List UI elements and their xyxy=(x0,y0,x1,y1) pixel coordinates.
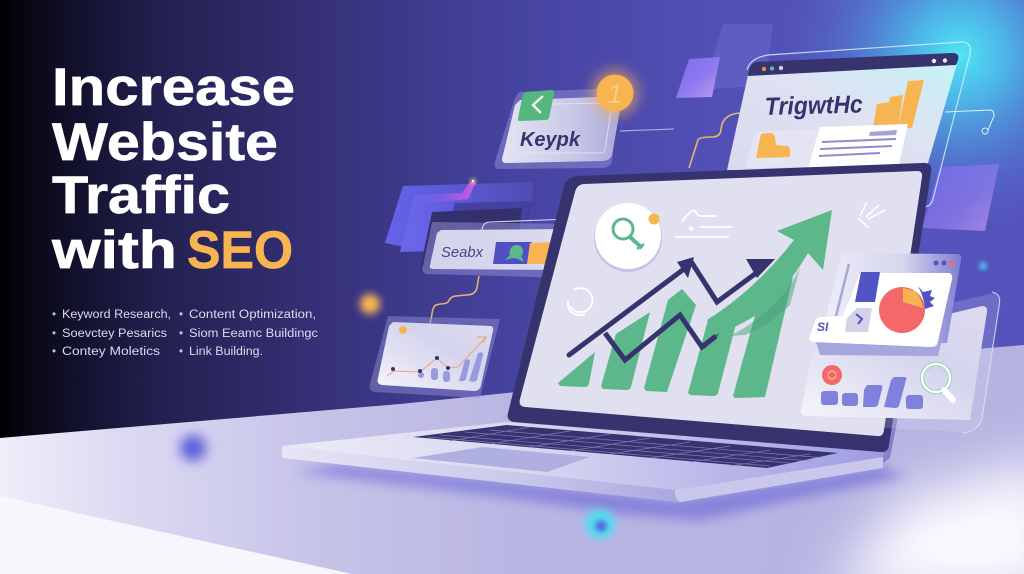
dark lower line xyxy=(605,315,720,360)
search text: Seabx xyxy=(441,244,483,261)
title: Increase xyxy=(52,58,295,117)
list column one: Soevctey Pesarics xyxy=(62,328,167,340)
panel: keyword card xyxy=(495,69,674,169)
mini bars xyxy=(821,377,923,409)
small tag text: SI xyxy=(817,320,829,334)
bars xyxy=(418,352,483,382)
icon: green back tile xyxy=(518,90,554,121)
button: blue with icon xyxy=(493,242,532,264)
target icon xyxy=(822,365,842,385)
list column two: • xyxy=(179,328,183,340)
loader ring xyxy=(568,288,592,315)
list column two xyxy=(179,309,318,358)
panel: browser window xyxy=(727,42,994,207)
orange block icon xyxy=(756,133,790,158)
list column one: Keyword Research, xyxy=(62,309,171,321)
panel: line chart card xyxy=(370,316,500,398)
laptop xyxy=(282,163,931,520)
icon: magnifier xyxy=(922,364,953,400)
wire: search card to chart card xyxy=(430,276,479,324)
glow: desk blue left xyxy=(180,435,206,461)
list column one: Contey Moletics xyxy=(62,346,160,358)
wire: browser to laptop xyxy=(689,113,740,168)
browser wire right xyxy=(945,110,994,134)
glow: cyan desk light xyxy=(585,509,615,539)
list column two: • xyxy=(179,346,183,358)
content strip xyxy=(745,125,907,168)
orange mini bars xyxy=(873,80,924,128)
trackpad xyxy=(413,447,590,472)
keyboard key rows xyxy=(428,427,825,466)
title: Website xyxy=(52,113,278,172)
glow: dot right xyxy=(979,262,987,270)
button: orange xyxy=(527,242,565,264)
badge: number one xyxy=(591,69,639,117)
big green arrow xyxy=(707,210,832,336)
under shadow xyxy=(816,340,942,356)
list column two: Siom Eeamc Buildingc xyxy=(189,328,318,340)
title xyxy=(51,58,295,280)
glow: orange light xyxy=(360,294,380,314)
browser body xyxy=(727,64,957,170)
title: Traffic xyxy=(52,166,230,225)
lower panel xyxy=(801,306,987,420)
panel: stacked purple layers xyxy=(385,178,533,270)
sparkle xyxy=(858,202,885,228)
list column two: Content Optimization, xyxy=(189,309,316,321)
panel: search card xyxy=(422,219,578,278)
badge: number one: 1 xyxy=(607,79,623,109)
title: SEO xyxy=(187,221,293,280)
keyword text: Keypk xyxy=(520,129,581,151)
white text card xyxy=(808,124,908,168)
list column one: • xyxy=(52,328,56,340)
browser headline: TrigwtHc xyxy=(764,90,863,121)
dark trend arrow xyxy=(569,257,775,355)
outer glass xyxy=(810,293,1000,432)
sidebar line xyxy=(836,264,849,316)
icon: search badge xyxy=(594,203,662,272)
arrow shadow xyxy=(730,268,800,336)
desk surface xyxy=(0,345,1024,574)
white text lines icon xyxy=(675,211,732,237)
list column one: • xyxy=(52,309,56,321)
screen hinge side xyxy=(883,165,930,463)
laptop base xyxy=(282,422,883,502)
keyboard xyxy=(413,425,838,468)
screen display xyxy=(520,171,922,436)
list column one: • xyxy=(52,346,56,358)
pie chart xyxy=(879,286,935,333)
main growth chart xyxy=(558,202,885,398)
feature list xyxy=(52,309,318,358)
panel: floating glass square top xyxy=(676,24,773,98)
browser glass outline xyxy=(747,42,970,207)
blue block xyxy=(855,272,880,302)
white front panel xyxy=(809,273,952,347)
window dots xyxy=(762,58,947,71)
back panel xyxy=(817,253,961,347)
laptop base shadow xyxy=(295,464,905,520)
title: with xyxy=(51,221,177,280)
panel: glass square right xyxy=(922,164,999,231)
screen bezel xyxy=(508,163,931,452)
panel: pie and bar dashboard xyxy=(801,253,1000,433)
browser title bar xyxy=(748,53,958,76)
nav tile xyxy=(845,308,872,332)
window dots xyxy=(934,260,954,266)
list column two: Link Building. xyxy=(189,346,263,358)
trend line xyxy=(387,337,486,376)
list column two: • xyxy=(179,309,183,321)
green bars xyxy=(558,277,793,398)
data points xyxy=(391,356,450,373)
connector line xyxy=(620,129,674,131)
list column one xyxy=(52,309,171,358)
